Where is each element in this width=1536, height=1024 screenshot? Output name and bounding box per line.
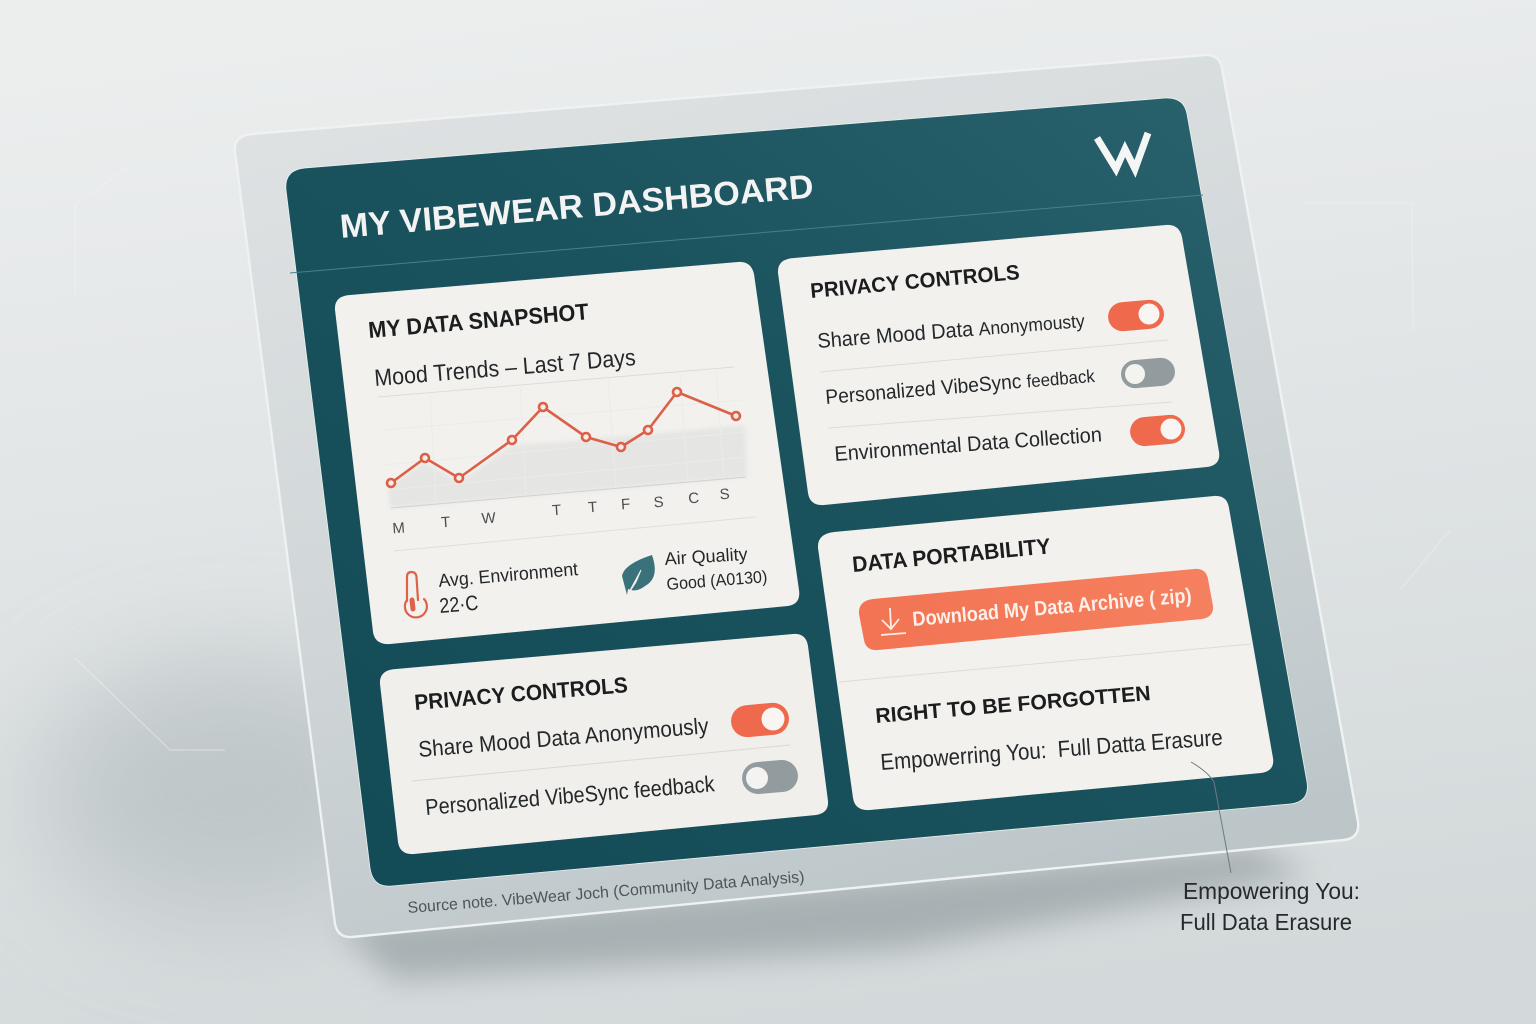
- air quality text: Good (A0130): [666, 567, 768, 594]
- source note: Source note. VibeWear Joch (Community Data Analysis): [407, 869, 805, 917]
- panel: my data snapshot: [335, 262, 799, 644]
- line chart: F: [621, 496, 631, 513]
- dashboard panel: [286, 98, 1307, 886]
- line chart: [378, 367, 747, 537]
- setting: personalized feedback: Personalized VibeSync feedback: [424, 771, 716, 820]
- setting: share mood data: Share Mood Data Anonymousty: [817, 309, 1086, 353]
- line chart: T: [552, 502, 562, 519]
- privacy heading left: PRIVACY CONTROLS: [413, 672, 629, 715]
- title: MY VIBEWEAR DASHBOARD: [339, 169, 815, 246]
- line chart: M: [392, 520, 406, 537]
- line chart: T: [441, 514, 451, 531]
- setting: share mood data: Share Mood Data Anonymously: [417, 713, 710, 762]
- callout text: Empowering You:: [1183, 878, 1360, 904]
- panel: privacy controls right: [778, 225, 1219, 505]
- air quality text: [664, 544, 768, 594]
- drop shadow under glass panel: [335, 845, 1310, 980]
- callout text: [1180, 878, 1360, 935]
- icon: thermometer: [405, 572, 427, 617]
- right to be forgotten heading: RIGHT TO BE FORGOTTEN: [874, 682, 1151, 728]
- average environment text: [438, 558, 579, 618]
- line chart: W: [481, 509, 497, 527]
- icon: download arrow: [881, 608, 906, 635]
- teal dashboard background: [286, 98, 1307, 886]
- line chart: T: [588, 499, 598, 516]
- chart title: Mood Trends – Last 7 Days: [373, 344, 637, 391]
- glass panel: [235, 55, 1358, 937]
- line chart: C: [688, 490, 700, 507]
- privacy heading right: PRIVACY CONTROLS: [809, 261, 1021, 303]
- snapshot card: [335, 262, 799, 644]
- callout leader line: [1191, 762, 1231, 873]
- portability card: [818, 496, 1273, 810]
- panel: privacy controls left: [380, 634, 828, 854]
- privacy card left: [380, 634, 828, 854]
- download button: [859, 569, 1213, 650]
- erasure text: Empowerring You: Full Datta Erasure: [879, 724, 1223, 775]
- icon: leaf: [622, 555, 655, 596]
- line chart: S: [653, 494, 664, 511]
- portability heading: DATA PORTABILITY: [851, 533, 1052, 577]
- toggle on: [1107, 299, 1165, 332]
- callout text: Full Data Erasure: [1180, 909, 1352, 935]
- setting: environmental data: Environmental Data Collection: [834, 423, 1103, 466]
- line chart: S: [719, 486, 730, 503]
- setting: personalized feedback: Personalized VibeSync feedback: [825, 364, 1096, 409]
- average environment text: 22·C: [438, 592, 479, 618]
- toggle on: [730, 702, 790, 738]
- average environment text: Avg. Environment: [438, 558, 579, 591]
- button label: Download My Data Archive ( zip): [911, 584, 1192, 631]
- panel: data portability: [818, 496, 1273, 810]
- toggle off: [1120, 357, 1176, 389]
- privacy card right: [778, 225, 1219, 505]
- toggle on 2: [1129, 414, 1186, 447]
- snapshot heading: MY DATA SNAPSHOT: [367, 298, 590, 343]
- air quality text: Air Quality: [664, 544, 748, 569]
- toggle off: [741, 759, 799, 795]
- logo W: [1097, 133, 1148, 169]
